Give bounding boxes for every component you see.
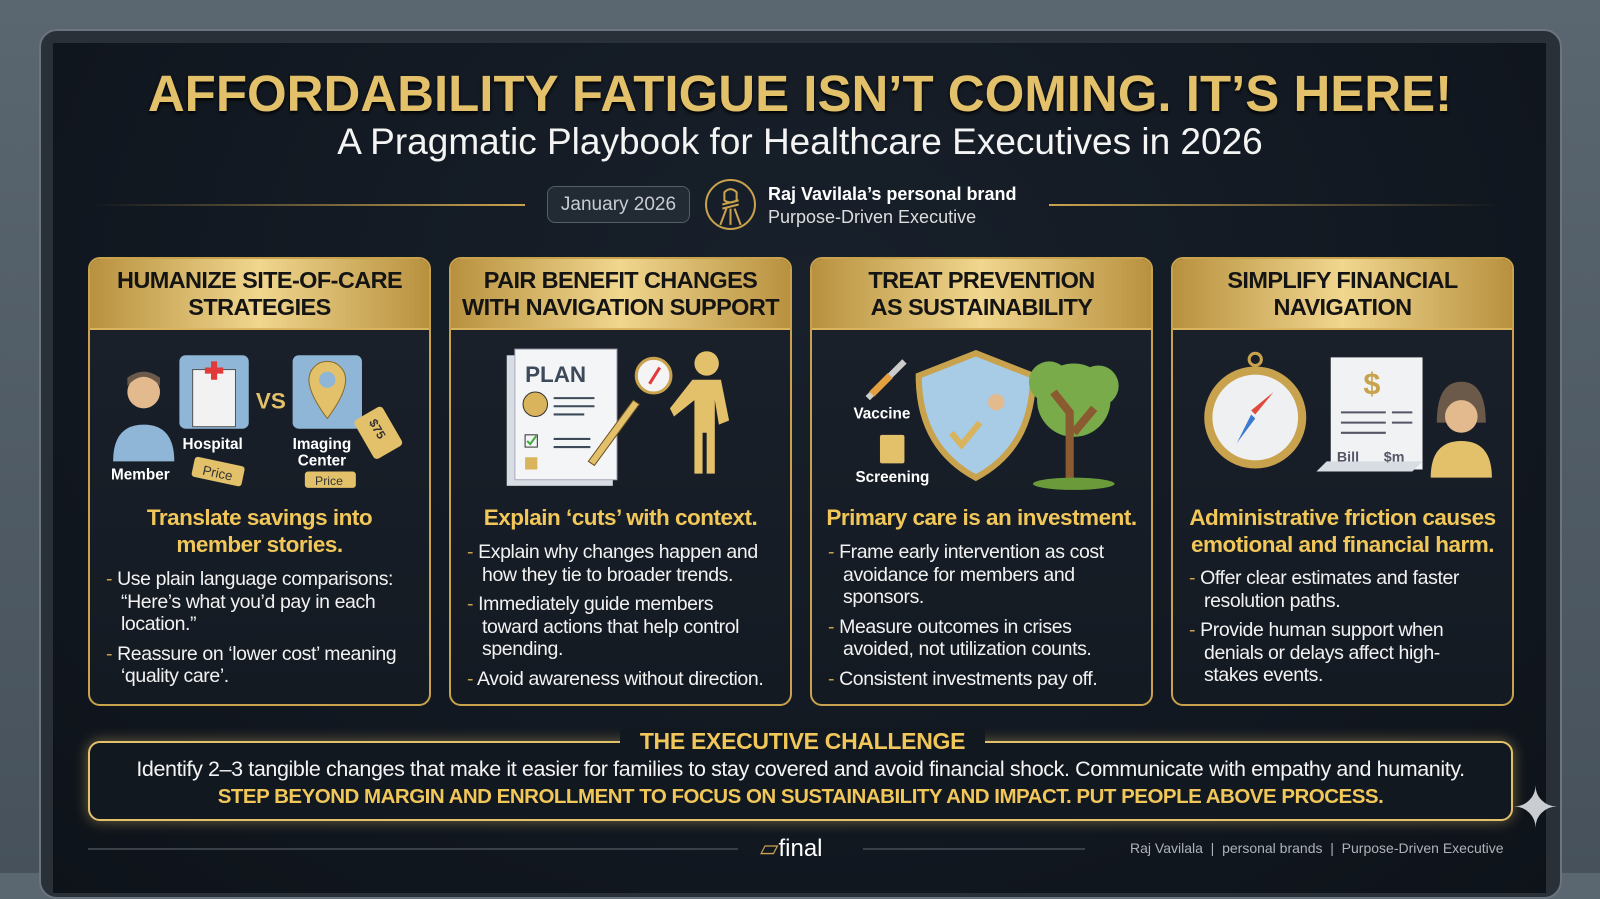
heading: STRATEGIES <box>188 294 331 320</box>
heading: NAVIGATION <box>1273 294 1412 320</box>
icon: brand logo <box>705 179 756 230</box>
subheading: Explain ‘cuts’ with context. <box>484 505 757 530</box>
panel: simplify financial navigation <box>1171 257 1514 706</box>
heading: PAIR BENEFIT CHANGES <box>484 267 757 293</box>
bullets <box>468 541 763 690</box>
title: AFFORDABILITY FATIGUE ISN’T COMING. IT’S HERE! <box>148 65 1452 122</box>
icon: sparkle: ✦ <box>1512 776 1559 839</box>
subheading <box>147 505 372 557</box>
icons: plan document and guide <box>506 348 730 486</box>
subheading: Administrative friction causes <box>1189 505 1496 530</box>
footer logo: ▱final <box>760 835 822 862</box>
subheading: Translate savings into <box>147 505 372 530</box>
subheading: member stories. <box>176 532 343 557</box>
icons: member hospital vs imaging <box>111 355 402 488</box>
bullets: Frame early intervention as cost avoidance for members and sponsors. <box>839 541 1104 608</box>
icons: plan document and guide: PLAN <box>525 362 586 387</box>
bullets: Use plain language comparisons: “Here’s what you’d pay in each location.” <box>117 568 393 635</box>
heading: TREAT PREVENTION <box>868 267 1095 293</box>
date badge <box>547 186 690 223</box>
footer <box>88 848 738 850</box>
brand text: Purpose-Driven Executive <box>768 207 976 227</box>
icons: member hospital vs imaging: $75 <box>366 417 388 442</box>
icons: member hospital vs imaging: Center <box>298 452 346 469</box>
icons: compass bill person: Bill <box>1337 449 1359 465</box>
callout: executive challenge: STEP BEYOND MARGIN AND ENROLLMENT TO FOCUS ON SUSTAINABILITY AND IMPACT. PUT PEOPLE ABOVE PROCESS. <box>218 785 1383 808</box>
bullets: Reassure on ‘lower cost’ meaning ‘quality care’. <box>117 642 396 687</box>
panel: treat prevention <box>810 257 1153 706</box>
icons: member hospital vs imaging: VS <box>256 388 286 413</box>
bullets: Consistent investments pay off. <box>839 668 1097 690</box>
heading: AS SUSTAINABILITY <box>871 294 1092 320</box>
brand text <box>768 184 1016 227</box>
footer credits: Raj Vavilala | personal brands | Purpose-Driven Executive <box>1130 840 1504 856</box>
subheading <box>1189 505 1496 557</box>
icons: member hospital vs imaging: Hospital <box>182 436 243 453</box>
heading <box>812 259 1151 330</box>
icons: compass bill person <box>1204 352 1492 478</box>
bullets: Offer clear estimates and faster resolution paths. <box>1200 567 1459 612</box>
date badge: January 2026 <box>561 194 676 215</box>
bullets <box>1190 567 1460 686</box>
heading: SIMPLIFY FINANCIAL <box>1227 267 1458 293</box>
heading <box>1173 259 1512 330</box>
icons: member hospital vs imaging: Price <box>201 463 234 484</box>
heading: WITH NAVIGATION SUPPORT <box>462 294 779 320</box>
challenge heading: THE EXECUTIVE CHALLENGE <box>640 728 965 754</box>
bullets: Measure outcomes in crises avoided, not utilization counts. <box>839 616 1091 660</box>
icons: vaccine shield tree: Vaccine <box>853 406 910 423</box>
icons: member hospital vs imaging: Imaging <box>293 436 351 453</box>
bullets: Immediately guide members toward actions that help control spending. <box>478 593 739 660</box>
icons: member hospital vs imaging: Member <box>111 467 170 484</box>
subheading: Primary care is an investment. <box>826 505 1137 530</box>
heading: HUMANIZE SITE-OF-CARE <box>117 267 402 293</box>
bullets: Provide human support when denials or delays affect high-stakes events. <box>1200 619 1443 686</box>
icons: compass bill person: $ <box>1363 367 1380 401</box>
subtitle: A Pragmatic Playbook for Healthcare Executives in 2026 <box>337 121 1263 162</box>
panel: pair benefit changes <box>449 257 792 706</box>
callout: executive challenge <box>88 741 1513 821</box>
icons: vaccine shield tree: Screening <box>855 469 929 486</box>
subheading: emotional and financial harm. <box>1191 532 1494 557</box>
icons: member hospital vs imaging: Price <box>315 474 343 488</box>
bullets <box>828 541 1104 690</box>
challenge text: Identify 2–3 tangible changes that make it easier for families to stay covered and avoid financial shock. Communicate with empathy and humanity. <box>136 757 1465 781</box>
icons: vaccine shield tree <box>853 350 1119 490</box>
icons: compass bill person: $m <box>1384 449 1404 465</box>
bullets: Avoid awareness without direction. <box>477 668 763 690</box>
bullets: Explain why changes happen and how they tie to broader trends. <box>478 541 758 586</box>
bullets <box>106 568 396 687</box>
brand text: Raj Vavilala’s personal brand <box>768 184 1016 204</box>
panel: humanize site-of-care <box>88 257 431 706</box>
heading <box>451 259 790 330</box>
heading <box>90 259 429 330</box>
